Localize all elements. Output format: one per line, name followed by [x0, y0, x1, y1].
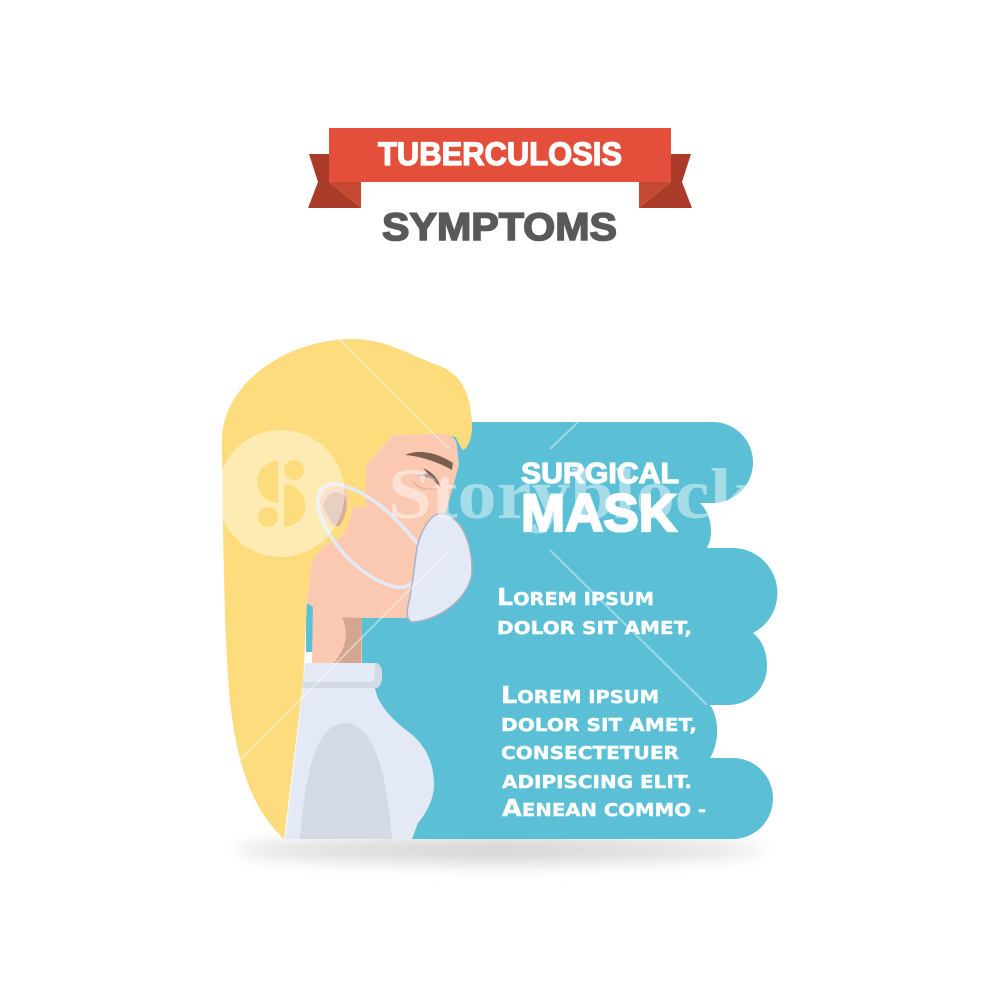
dress inner panel	[300, 723, 392, 839]
neck	[312, 600, 362, 664]
text block 2	[501, 681, 706, 822]
ear	[320, 486, 348, 526]
watermark diagonal lines	[240, 340, 707, 760]
heading: surgical mask: MASK	[521, 484, 677, 543]
text block 2: LOREM IPSUM	[501, 681, 659, 709]
neck shadow	[333, 617, 362, 664]
figure: woman with surgical mask	[222, 339, 472, 839]
text block 2: CONSECTETUER	[501, 743, 679, 764]
text block 2: ADIPISCING ELIT.	[502, 772, 692, 793]
text block 1	[497, 583, 692, 639]
text block 2: DOLOR SIT AMET,	[501, 715, 697, 736]
heading: surgical mask: SURGICAL	[521, 458, 679, 490]
watermark text: Storyblock	[388, 454, 753, 534]
ground shadow	[236, 836, 764, 864]
text block 1: LOREM IPSUM	[497, 583, 654, 611]
heading: surgical mask	[521, 458, 679, 543]
panel: blue scalloped background	[306, 422, 777, 839]
eyebrow	[405, 452, 453, 470]
text block 1: DOLOR SIT AMET,	[497, 618, 692, 639]
surgical mask	[407, 514, 472, 622]
watermark logo	[218, 430, 344, 557]
subtitle: SYMPTOMS	[382, 206, 617, 249]
face	[307, 434, 459, 618]
eye	[413, 468, 441, 489]
hair	[222, 339, 472, 839]
title ribbon: TUBERCULOSIS	[378, 136, 622, 172]
dress	[285, 688, 434, 839]
text block 2: AENEAN COMMO -	[502, 794, 706, 822]
collar	[302, 663, 382, 688]
mask strap	[318, 484, 421, 588]
title ribbon	[308, 128, 692, 208]
